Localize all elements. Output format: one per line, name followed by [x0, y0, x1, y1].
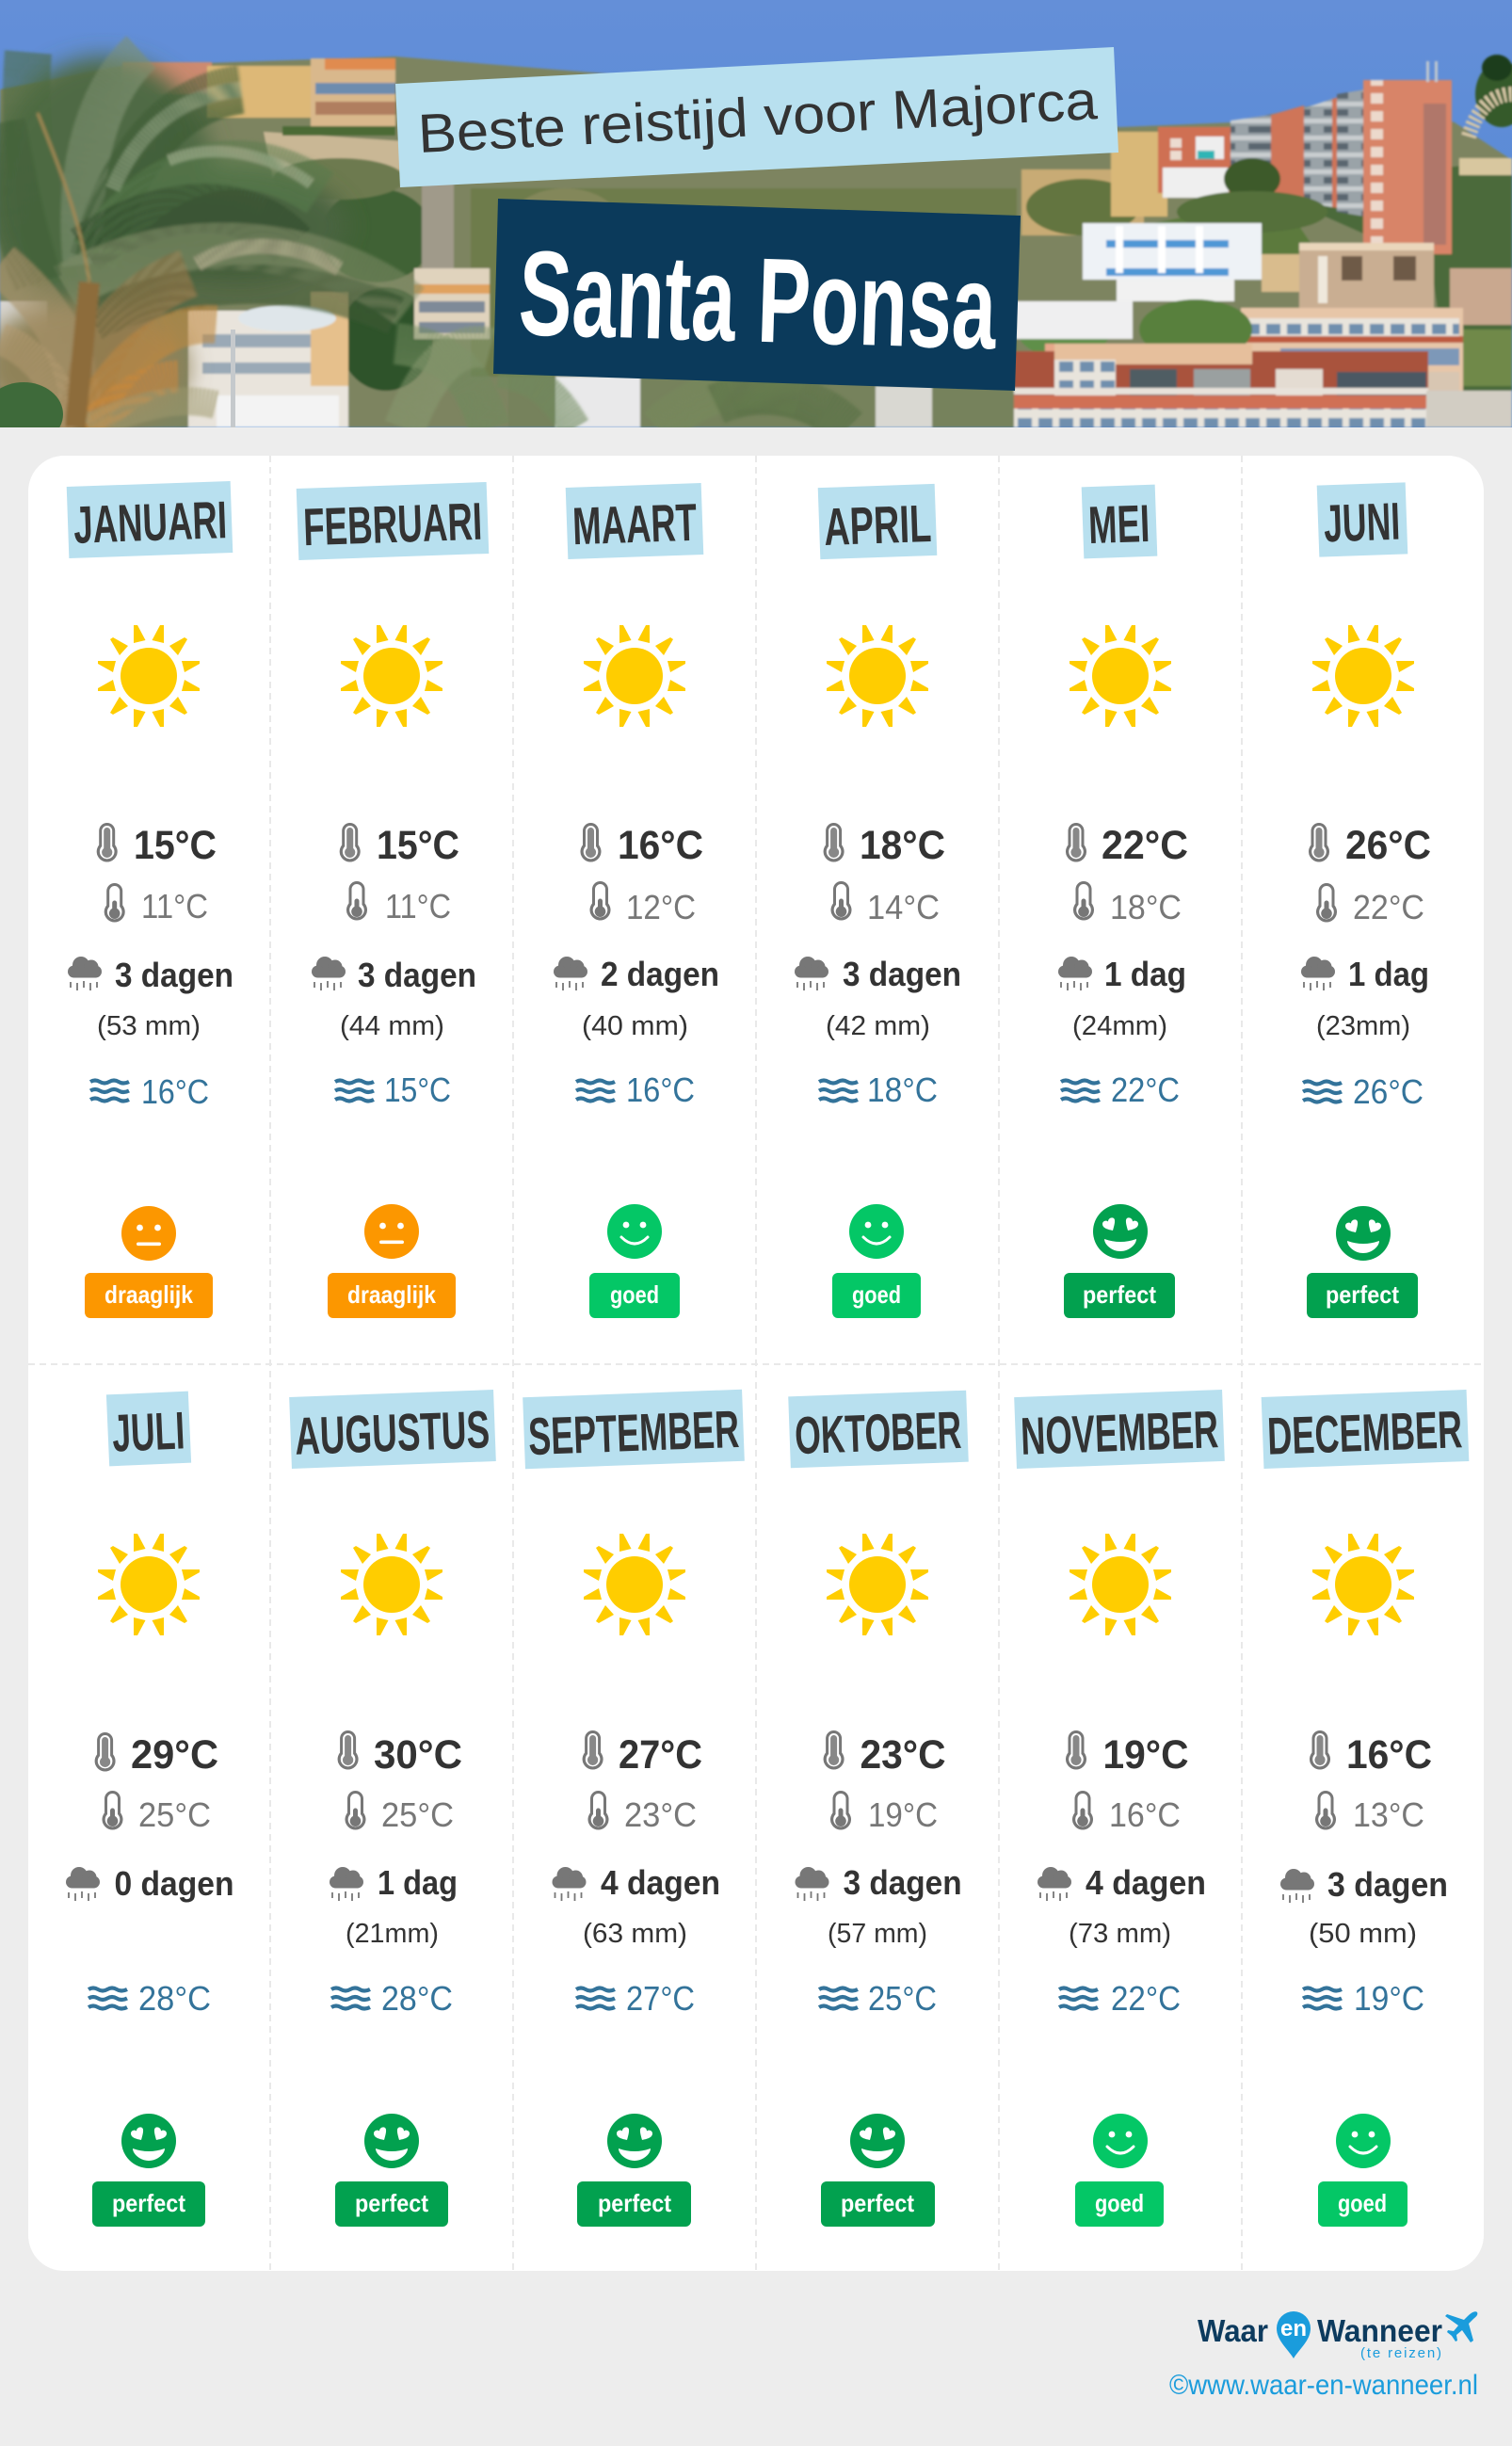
rating badge: perfect: perfect — [598, 2189, 671, 2217]
rating face — [849, 1204, 904, 1259]
month label: augustus: AUGUSTUS — [294, 1399, 491, 1466]
rating badge: goed: goed — [610, 1280, 659, 1309]
column: juli — [66, 1392, 233, 2227]
icon: sun — [1070, 1534, 1171, 1635]
rainfall: (73 mm) — [1069, 1919, 1171, 1949]
icon: sun — [1312, 625, 1414, 727]
max temperature — [824, 1730, 945, 1778]
rainfall: (23mm) — [1316, 1011, 1410, 1041]
max temperature: 30°C — [374, 1732, 462, 1778]
rain days — [795, 1863, 962, 1902]
sea temperature: 22°C — [1111, 1070, 1180, 1109]
month label: oktober: OKTOBER — [794, 1400, 962, 1465]
month label: juli — [106, 1392, 191, 1466]
month label: januari — [67, 481, 233, 558]
column: mei — [1058, 485, 1188, 1318]
rain days: 3 dagen — [115, 956, 233, 994]
rating badge: perfect — [577, 2181, 691, 2227]
min temperature: 19°C — [868, 1795, 938, 1834]
rain days — [554, 955, 719, 993]
sea temperature: 25°C — [868, 1979, 937, 2018]
sea temperature: 16°C — [626, 1070, 695, 1109]
month label: februari: FEBRUARI — [302, 491, 483, 556]
min temperature — [345, 1791, 454, 1834]
min temperature: 25°C — [138, 1795, 211, 1834]
sea temperature — [331, 1979, 453, 2018]
month label: maart — [566, 483, 703, 559]
website credit: ©www.waar-en-wanneer.nl — [1169, 2370, 1478, 2401]
column: april — [795, 484, 961, 1318]
column: augustus — [289, 1390, 496, 2227]
month label: september: SEPTEMBER — [527, 1399, 740, 1466]
rating face — [121, 2114, 176, 2168]
min temperature: 14°C — [867, 888, 940, 926]
rating badge: perfect — [335, 2181, 448, 2227]
month label: februari — [297, 482, 489, 560]
sea temperature — [90, 1072, 209, 1111]
min temperature: 25°C — [381, 1795, 454, 1834]
icon: sun — [341, 625, 442, 727]
min temperature — [105, 883, 208, 925]
month label: juli: JULI — [111, 1400, 185, 1463]
max temperature: 16°C — [618, 823, 703, 868]
rating face — [364, 2114, 419, 2168]
icon: map pin with en — [1277, 2311, 1311, 2358]
title: Santa Ponsa: Santa Ponsa — [517, 226, 999, 375]
max temperature — [1310, 1730, 1432, 1778]
column: november — [1014, 1390, 1225, 2227]
rainfall: (53 mm) — [97, 1011, 201, 1041]
sea temperature: 18°C — [867, 1070, 938, 1109]
rating face — [364, 1204, 419, 1259]
rain days — [1280, 1865, 1448, 1904]
rating face — [1093, 1204, 1148, 1259]
min temperature — [830, 1791, 938, 1834]
sea temperature — [819, 1979, 937, 2018]
max temperature — [97, 823, 217, 868]
rating face — [607, 2114, 662, 2168]
sea temperature: 16°C — [141, 1072, 209, 1111]
min temperature — [587, 1791, 697, 1834]
month label: maart: MAART — [571, 492, 698, 555]
column: december — [1262, 1390, 1469, 2227]
column: juni — [1301, 482, 1431, 1318]
icon: sun — [98, 1534, 200, 1635]
month label: april — [818, 484, 937, 559]
rating badge: goed: goed — [1338, 2189, 1387, 2217]
rating badge: goed — [1318, 2181, 1407, 2227]
max temperature — [1066, 1730, 1188, 1778]
max temperature: 23°C — [861, 1732, 945, 1778]
min temperature: 13°C — [1353, 1795, 1424, 1834]
icon: sun — [98, 625, 200, 727]
header photo: Santa Ponsa hillside with palm tree — [0, 0, 1512, 446]
rain days — [1301, 955, 1429, 993]
rating badge: goed — [1075, 2181, 1164, 2227]
rating badge: goed — [589, 1273, 680, 1318]
icon: sun — [1312, 1534, 1414, 1635]
icon: sun — [827, 625, 928, 727]
rating badge: perfect: perfect — [1326, 1280, 1399, 1309]
rain days — [66, 1864, 233, 1903]
sea temperature — [576, 1979, 695, 2018]
column: september — [523, 1390, 745, 2227]
column: oktober — [788, 1391, 969, 2227]
sea temperature — [88, 1979, 211, 2018]
panel: climate table card — [28, 456, 1484, 2271]
month label: januari: JANUARI — [72, 490, 228, 555]
sea temperature — [576, 1070, 695, 1109]
rain days: 1 dag — [1104, 955, 1186, 993]
sea temperature: 28°C — [381, 1979, 453, 2018]
month label: augustus — [289, 1390, 496, 1469]
rating badge: perfect — [92, 2181, 205, 2227]
min temperature: 11°C — [141, 887, 208, 925]
rating badge: perfect: perfect — [355, 2189, 428, 2217]
rainfall: (57 mm) — [828, 1919, 927, 1949]
min temperature — [102, 1791, 211, 1834]
rating face — [1093, 2114, 1148, 2168]
icon: airplane — [1445, 2311, 1477, 2342]
rain days: 3 dagen — [1327, 1865, 1448, 1904]
sea temperature — [819, 1070, 938, 1109]
rainfall: (21mm) — [346, 1919, 439, 1949]
min temperature: 16°C — [1109, 1795, 1181, 1834]
rainfall: (42 mm) — [826, 1011, 930, 1041]
max temperature: 16°C — [1346, 1732, 1432, 1778]
rating badge: perfect: perfect — [1083, 1280, 1156, 1309]
rain days — [312, 956, 476, 994]
rating badge: draaglijk — [85, 1273, 213, 1318]
rainfall: (24mm) — [1072, 1011, 1167, 1041]
sea temperature: 15°C — [384, 1070, 451, 1109]
max temperature — [1066, 823, 1188, 868]
rain days — [330, 1863, 458, 1902]
max temperature: 15°C — [377, 823, 459, 868]
month label: juni: JUNI — [1323, 491, 1401, 553]
rating badge: draaglijk: draaglijk — [347, 1280, 436, 1309]
max temperature — [338, 1730, 462, 1778]
sea temperature — [1059, 1979, 1181, 2018]
month label: september — [523, 1390, 745, 1469]
month label: juni — [1317, 482, 1407, 557]
max temperature: 19°C — [1103, 1732, 1188, 1778]
sea temperature — [1303, 1072, 1424, 1111]
icon: sun — [827, 1534, 928, 1635]
sea temperature: 28°C — [138, 1979, 211, 2018]
palm tree foliage — [0, 52, 847, 433]
rating face — [121, 1206, 176, 1261]
rating badge: goed: goed — [1095, 2189, 1144, 2217]
rain days: 4 dagen — [601, 1863, 720, 1902]
rating face — [1336, 2114, 1391, 2168]
sea temperature: 27°C — [626, 1979, 695, 2018]
min temperature — [830, 881, 940, 926]
rating badge: perfect: perfect — [841, 2189, 914, 2217]
min temperature — [1315, 1791, 1424, 1834]
min temperature: 23°C — [624, 1795, 697, 1834]
max temperature — [824, 823, 945, 868]
min temperature — [589, 881, 696, 926]
column: februari — [297, 482, 489, 1318]
icon: sun — [584, 625, 685, 727]
max temperature: 29°C — [131, 1732, 218, 1778]
rain days — [552, 1863, 720, 1902]
rainfall: (40 mm) — [582, 1011, 688, 1041]
month label: november: NOVEMBER — [1020, 1399, 1219, 1466]
sea temperature: 22°C — [1111, 1979, 1181, 2018]
min temperature: 12°C — [626, 888, 696, 926]
rain days: 0 dagen — [115, 1864, 233, 1903]
rating badge: perfect — [1307, 1273, 1418, 1318]
sea temperature: 19°C — [1354, 1979, 1424, 2018]
column: januari — [67, 481, 233, 1318]
max temperature — [1309, 823, 1431, 868]
logo: Waar en Wanneer: (te reizen) — [1360, 2345, 1441, 2361]
min temperature — [1073, 881, 1182, 926]
icon: sun — [341, 1534, 442, 1635]
logo: Waar en Wanneer: Wanneer — [1317, 2313, 1442, 2348]
rating face — [1336, 1206, 1391, 1261]
min temperature: 22°C — [1353, 888, 1424, 926]
rating badge: perfect — [1064, 1273, 1175, 1318]
column: maart — [554, 483, 719, 1318]
logo: Waar en Wanneer — [1198, 2311, 1477, 2361]
rain days: 3 dagen — [843, 955, 961, 993]
title: Santa Ponsa — [493, 199, 1021, 391]
min temperature — [346, 881, 451, 925]
rain days: 3 dagen — [358, 956, 476, 994]
sea temperature — [1303, 1979, 1424, 2018]
month label: mei: MEI — [1087, 493, 1150, 555]
min temperature — [1072, 1791, 1181, 1834]
rating badge: perfect: perfect — [112, 2189, 185, 2217]
rain days — [1037, 1863, 1206, 1902]
month label: november — [1014, 1390, 1225, 1469]
rainfall: (44 mm) — [340, 1011, 444, 1041]
min temperature: 11°C — [385, 887, 451, 925]
rating badge: draaglijk: draaglijk — [105, 1280, 193, 1309]
max temperature — [95, 1732, 218, 1778]
sea temperature — [335, 1070, 451, 1109]
rainfall: (50 mm) — [1309, 1919, 1417, 1949]
icon: sun — [1070, 625, 1171, 727]
sea temperature: 26°C — [1353, 1072, 1424, 1111]
rating face — [850, 2114, 905, 2168]
rating face — [607, 1204, 662, 1259]
heading: Beste reistijd voor Majorca: Beste reistijd voor Majorca — [416, 70, 1100, 165]
min temperature — [1316, 883, 1424, 926]
max temperature — [580, 823, 703, 868]
month label: april: APRIL — [823, 493, 932, 556]
rain days — [68, 956, 233, 994]
max temperature: 15°C — [134, 823, 217, 868]
rating badge: draaglijk — [328, 1273, 456, 1318]
max temperature: 22°C — [1102, 823, 1188, 868]
icon: map pin with en: en — [1280, 2316, 1307, 2341]
rating badge: perfect — [821, 2181, 935, 2227]
rating badge: goed: goed — [852, 1280, 901, 1309]
rain days — [1058, 955, 1186, 993]
rain days: 1 dag — [378, 1863, 458, 1902]
rating badge: goed — [832, 1273, 921, 1318]
max temperature — [583, 1730, 702, 1778]
rain days — [795, 955, 961, 993]
rain days: 3 dagen — [844, 1863, 962, 1902]
max temperature: 18°C — [860, 823, 945, 868]
rainfall: (63 mm) — [583, 1919, 687, 1949]
sea temperature — [1061, 1070, 1180, 1109]
max temperature: 27°C — [619, 1732, 702, 1778]
rain days: 1 dag — [1348, 955, 1429, 993]
max temperature — [340, 823, 459, 868]
month label: oktober — [788, 1391, 969, 1468]
rain days: 2 dagen — [601, 955, 719, 993]
rain days: 4 dagen — [1086, 1863, 1206, 1902]
min temperature: 18°C — [1110, 888, 1182, 926]
icon: sun — [584, 1534, 685, 1635]
heading: Beste reistijd voor Majorca — [395, 47, 1118, 187]
month label: mei — [1082, 485, 1157, 558]
logo: Waar en Wanneer: Waar — [1198, 2313, 1268, 2348]
max temperature: 26°C — [1345, 823, 1431, 868]
